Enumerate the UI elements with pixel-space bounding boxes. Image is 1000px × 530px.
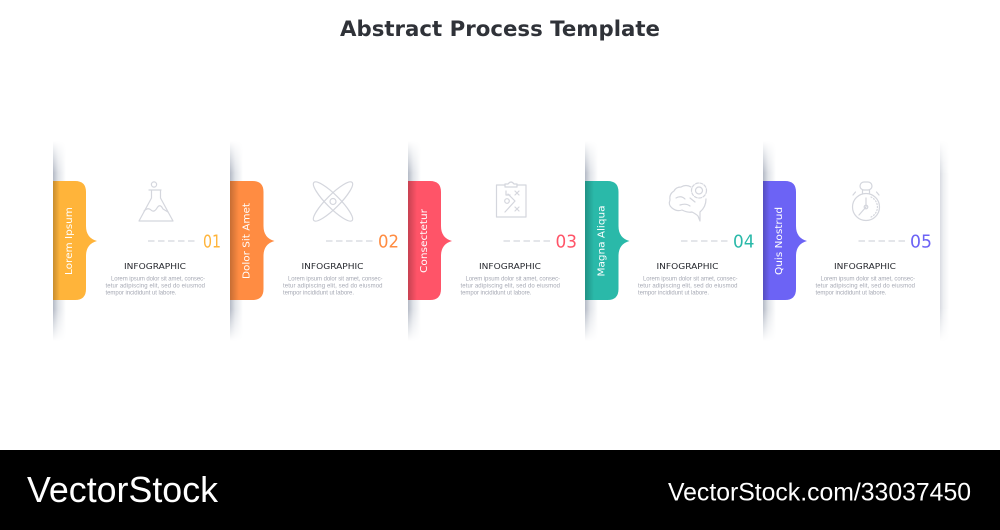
panel 2 number: 02 <box>378 232 399 252</box>
panel 2 dashed connector <box>326 240 372 242</box>
panel 5 tab: Quis Nostrud <box>774 207 785 275</box>
panel 1 shadow <box>53 144 64 337</box>
panel 2 text <box>283 276 382 296</box>
panel 2 tab <box>230 181 274 300</box>
panel 4 heading: INFOGRAPHIC <box>656 262 718 271</box>
panel 3 text <box>460 276 560 296</box>
panel 1 tab: Lorem Ipsum <box>64 207 75 275</box>
panel 4 number: 04 <box>733 232 754 252</box>
panel 5 tab <box>763 181 807 300</box>
closing panel shadow <box>940 148 946 333</box>
footer url: VectorStock.com/33037450 <box>668 478 971 506</box>
panel 3 tab <box>408 181 452 300</box>
panel 4 dashed connector <box>681 240 728 242</box>
panel 5: Quis Nostrud <box>763 141 932 341</box>
icon: brain with gear <box>669 183 706 221</box>
panel 3 text: Lorem ipsum dolor sit amet, consec- <box>466 276 560 282</box>
panel 2: Dolor Sit Amet <box>230 141 399 341</box>
icon: stopwatch <box>852 182 880 220</box>
panel 3 heading: INFOGRAPHIC <box>479 262 541 271</box>
panel 4 text <box>638 276 738 296</box>
panel 3 shadow <box>408 144 419 337</box>
panel 3 number: 03 <box>556 232 577 252</box>
panel 5 text: tetur adipiscing elit, sed do eiusmod <box>816 284 915 290</box>
panel 2 tab: Dolor Sit Amet <box>242 203 252 279</box>
panel 5 heading: INFOGRAPHIC <box>834 262 896 271</box>
panel 4: Magna Aliqua <box>585 141 754 341</box>
panel 2 text: Lorem ipsum dolor sit amet, consec- <box>288 276 382 282</box>
panel 2 shadow <box>230 144 241 337</box>
panel 5 text: Lorem ipsum dolor sit amet, consec- <box>820 276 915 282</box>
panel 1 heading: INFOGRAPHIC <box>124 262 186 271</box>
title: Abstract Process Template <box>340 17 660 41</box>
icon: clipboard plan <box>496 182 526 217</box>
footer bar <box>0 450 1000 530</box>
panel 1 text: tetur adipiscing elit, sed do eiusmod <box>106 284 205 290</box>
panel 3 dashed connector <box>504 240 550 242</box>
panel 5 dashed connector <box>858 240 905 242</box>
icon: flask <box>139 182 173 221</box>
panel 5 text <box>816 276 915 296</box>
panel 1 dashed connector <box>148 240 195 242</box>
panel 4 shadow <box>585 144 596 337</box>
panel 3: Consectetur <box>408 141 577 341</box>
panel 4 text: Lorem ipsum dolor sit amet, consec- <box>643 276 738 282</box>
panel 3 text: tempor incididunt ut labore. <box>460 290 532 296</box>
panel 4 text: tempor incididunt ut labore. <box>638 290 709 296</box>
footer logo: VectorStock <box>27 469 219 510</box>
panel 2 text: tempor incididunt ut labore. <box>283 290 354 296</box>
panel 5 shadow <box>763 144 774 337</box>
panel 4 tab <box>585 181 630 300</box>
panel 1: Lorem Ipsum <box>53 141 221 341</box>
panel 1 text: tempor incididunt ut labore. <box>106 290 177 296</box>
panel 2 heading: INFOGRAPHIC <box>302 262 364 271</box>
panel 3 text: tetur adipiscing elit, sed do eiusmod <box>460 284 560 290</box>
panel 4 tab: Magna Aliqua <box>596 206 608 276</box>
panel 1 tab <box>53 181 97 300</box>
panel 5 number: 05 <box>910 232 932 252</box>
panel 1 text <box>106 276 205 296</box>
panel 2 text: tetur adipiscing elit, sed do eiusmod <box>283 284 382 290</box>
panel 3 tab: Consectetur <box>419 208 430 273</box>
panel 1 text: Lorem ipsum dolor sit amet, consec- <box>111 276 205 282</box>
panel 5 text: tempor incididunt ut labore. <box>816 290 887 296</box>
icon: atom <box>309 178 357 225</box>
panel 4 text: tetur adipiscing elit, sed do eiusmod <box>638 284 738 290</box>
panel 1 number: 01 <box>203 232 221 252</box>
